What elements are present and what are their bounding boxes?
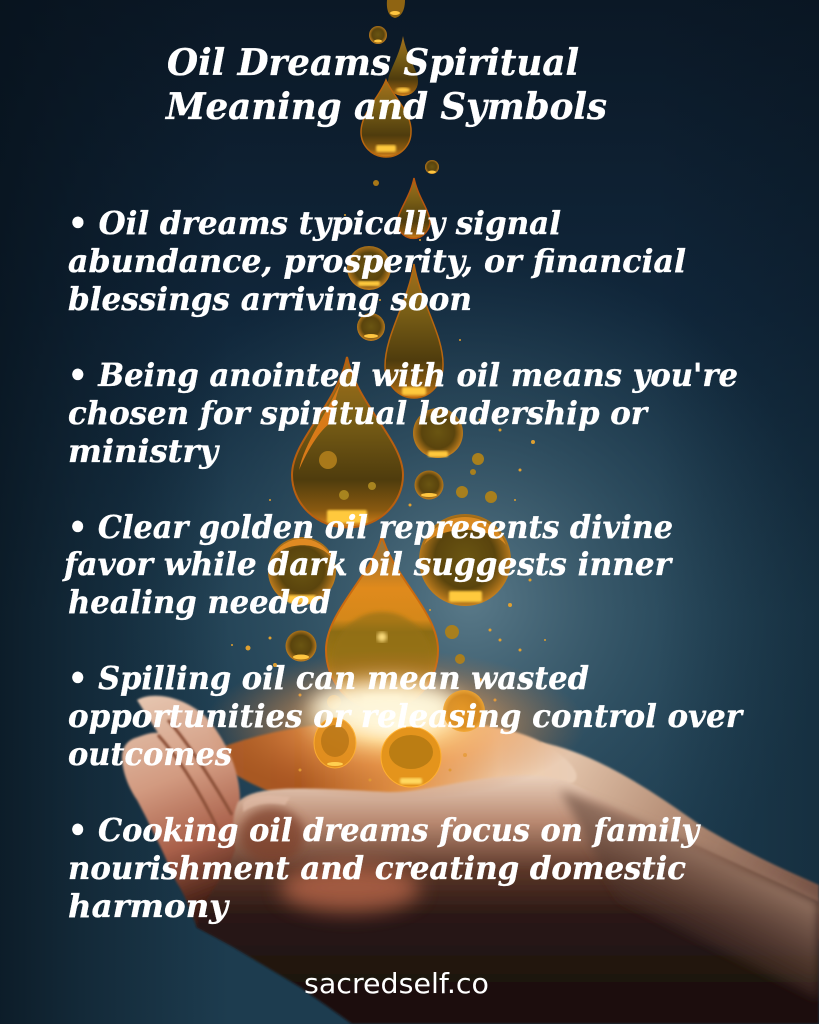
- bubble: [414, 470, 444, 500]
- text block: golden oil: [62, 508, 673, 621]
- thumb shading: [240, 807, 304, 863]
- drop: [388, 36, 418, 96]
- large bubble left: [268, 537, 336, 605]
- text block: golden oil: healing needed: [68, 583, 331, 621]
- large bubble right: [419, 514, 511, 606]
- large drop: [292, 357, 403, 527]
- footer: website: sacredself.co: [304, 967, 489, 1000]
- drop: [385, 264, 443, 398]
- lit hollow of palm: [280, 864, 420, 912]
- text block: spilling oil: [68, 659, 744, 773]
- text block: spilling oil: • Spilling oil can mean wasted: [68, 659, 589, 697]
- finger creases: [168, 720, 232, 815]
- bubble: [413, 408, 463, 458]
- central glow: [205, 650, 585, 800]
- text block: spilling oil: outcomes: [68, 735, 232, 773]
- text block: cooking oil: nourishment and creating domestic: [68, 849, 686, 887]
- small bubbles: [327, 625, 465, 709]
- bubble: [347, 246, 391, 290]
- text block: cooking oil: harmony: [68, 887, 230, 925]
- drop: [361, 80, 411, 157]
- text block: abundance: abundance, prosperity, or financial: [68, 242, 686, 280]
- rear palm: [205, 720, 577, 800]
- text block: abundance: [68, 204, 686, 318]
- title: Meaning and Symbols: [164, 86, 607, 128]
- small bubbles: [456, 453, 497, 503]
- bubble: [373, 180, 379, 186]
- text block: cooking oil: • Cooking oil dreams focus on family: [68, 811, 701, 849]
- icon: cupped hands: [122, 696, 819, 1024]
- text block: cooking oil: [68, 811, 701, 925]
- drop: [397, 178, 430, 238]
- rear arm: [540, 742, 819, 940]
- title: Oil Dreams Spiritual: [167, 42, 579, 84]
- text block: anointed: [68, 356, 738, 470]
- icon: sparkles: [231, 214, 546, 782]
- text block: abundance: blessings arriving soon: [68, 280, 472, 318]
- title: [164, 42, 607, 128]
- icon: oil drops and bubbles: [268, 0, 511, 710]
- text block: anointed: • Being anointed with oil means you're: [68, 356, 738, 394]
- text block: abundance: • Oil dreams typically signal: [68, 204, 561, 242]
- large orange drop: [326, 536, 438, 710]
- bubble: [369, 26, 387, 44]
- text block: golden oil: favor while dark oil suggests inner: [62, 545, 673, 583]
- front hand: [197, 775, 819, 1024]
- fingers: [122, 696, 245, 950]
- small top drop: [387, 0, 405, 18]
- bubble: [425, 160, 439, 174]
- wrist light: [560, 790, 819, 1000]
- text block: golden oil: • Clear golden oil represents divine: [68, 508, 673, 546]
- icon: bubbles in palm: [314, 690, 485, 787]
- bubble: [357, 313, 385, 341]
- text block: spilling oil: opportunities or releasing control over: [68, 697, 744, 735]
- bubble: [286, 630, 316, 662]
- thumb nail: [243, 795, 290, 812]
- text block: anointed: ministry: [68, 432, 220, 470]
- text block: anointed: chosen for spiritual leadership or: [68, 394, 649, 432]
